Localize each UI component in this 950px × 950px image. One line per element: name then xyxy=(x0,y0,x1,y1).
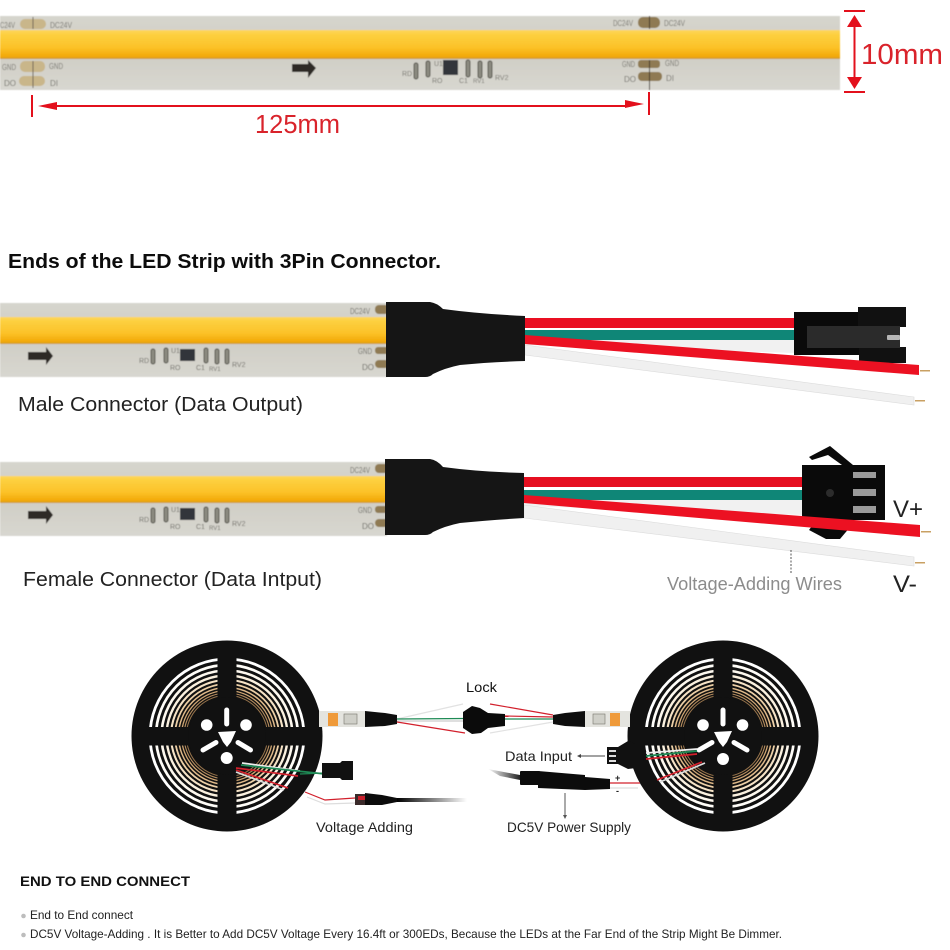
lock connector xyxy=(463,706,505,734)
left reel spare connector xyxy=(300,761,353,780)
125mm label: 125mm xyxy=(255,111,340,139)
note: end to end connect: End to End connect xyxy=(30,908,134,922)
pads xyxy=(375,464,389,527)
strip silkscreen labels: RO xyxy=(432,78,443,85)
panel: top LED strip xyxy=(0,16,840,90)
strip silkscreen labels: DI xyxy=(50,79,58,88)
right reel data input connector xyxy=(607,741,636,769)
silkscreen labels: RD xyxy=(139,358,149,365)
silkscreen labels: C1 xyxy=(196,365,205,372)
icon: direction arrow xyxy=(28,506,53,524)
heading: end to end connect: END TO END CONNECT xyxy=(20,873,190,889)
silkscreen labels: RV2 xyxy=(232,521,246,528)
female: rear wires xyxy=(524,477,925,566)
silkscreen labels: GND xyxy=(358,347,372,356)
dimension: 125mm xyxy=(31,92,650,139)
left solder pads xyxy=(19,17,46,88)
panel: female connector strip xyxy=(0,462,389,536)
label: V+: V+ xyxy=(893,496,923,523)
strip silkscreen labels: GND xyxy=(2,63,16,72)
right solder pads xyxy=(638,16,662,90)
silkscreen labels: DO xyxy=(362,522,374,531)
male: heat-shrink sleeve xyxy=(386,302,525,377)
silkscreen labels: U1 xyxy=(171,507,180,514)
yellow COB band xyxy=(0,476,387,503)
strip silkscreen labels: RV1 xyxy=(473,79,485,85)
left mini strip with lead xyxy=(319,704,465,733)
strip silkscreen labels: GND xyxy=(49,62,63,71)
icon: direction arrow xyxy=(28,347,53,365)
silkscreen labels: U1 xyxy=(171,348,180,355)
silkscreen labels: DC24V xyxy=(350,307,371,316)
strip silkscreen labels: C1 xyxy=(459,78,468,85)
silkscreen labels: DO xyxy=(362,363,374,372)
DC5V power plug xyxy=(488,769,640,796)
right mini strip with lead xyxy=(490,704,630,733)
female: connector housing xyxy=(802,446,885,539)
heading: ends of strip: Ends of the LED Strip with 3Pin Connector. xyxy=(8,251,441,273)
strip silkscreen labels: DI xyxy=(666,74,674,83)
strip silkscreen labels xyxy=(0,19,686,88)
note: voltage adding advice: DC5V Voltage-Adding . It is Better to Add DC5V Voltage Every 16.4ft or 300EDs, Because the LEDs at the Far End of the Strip Might Be Dimmer. xyxy=(30,927,782,941)
voltage adding plug xyxy=(305,792,467,805)
strip silkscreen labels: GND xyxy=(622,60,635,69)
silkscreen labels: RV1 xyxy=(209,526,221,532)
strip silkscreen labels: DO xyxy=(624,75,636,84)
male: rear wires xyxy=(525,318,925,405)
reel wires xyxy=(236,763,325,790)
silkscreen labels: RD xyxy=(139,517,149,524)
callout: data input xyxy=(505,748,605,764)
silkscreen labels: DC24V xyxy=(350,466,371,475)
strip silkscreen labels: C24V xyxy=(0,21,15,30)
strip silkscreen labels: DC24V xyxy=(664,19,686,28)
arrow: power supply pointer xyxy=(563,793,567,819)
callout: voltage-adding wires: Voltage-Adding Wires xyxy=(667,574,842,594)
pads xyxy=(375,305,389,368)
female: red voltage wire xyxy=(524,495,931,537)
chip and resistors xyxy=(151,348,229,364)
10mm label: 10mm xyxy=(861,39,943,71)
silkscreen labels: RV1 xyxy=(209,367,221,373)
strip silkscreen labels: DO xyxy=(4,79,16,88)
label: V-: V- xyxy=(893,571,917,598)
label: DC5V power supply: DC5V Power Supply xyxy=(507,819,631,835)
strip silkscreen labels: RD xyxy=(402,71,412,78)
icon: direction arrow xyxy=(292,60,316,78)
yellow COB band xyxy=(0,30,840,59)
chip and resistors xyxy=(414,60,492,79)
male: connector housing xyxy=(794,307,906,363)
DC5V power plug: - xyxy=(616,786,619,796)
reel wires xyxy=(646,749,705,782)
silkscreen labels xyxy=(139,466,374,532)
label: male connector: Male Connector (Data Output) xyxy=(18,394,303,416)
label: female connector: Female Connector (Data Intput) xyxy=(23,569,322,591)
silkscreen labels: RO xyxy=(170,524,181,531)
dimension: 10mm xyxy=(844,10,943,93)
male: red voltage wire xyxy=(525,335,930,375)
chip and resistors xyxy=(151,507,229,523)
icon: left LED reel xyxy=(132,640,325,832)
silkscreen labels: RO xyxy=(170,365,181,372)
panel: male connector strip xyxy=(0,303,389,377)
strip silkscreen labels: U1 xyxy=(434,61,443,68)
DC5V power plug: + xyxy=(615,773,620,783)
label: lock: Lock xyxy=(466,679,498,695)
strip silkscreen labels: DC24V xyxy=(613,19,634,28)
female: heat-shrink sleeve xyxy=(385,459,524,535)
yellow COB band xyxy=(0,317,387,344)
silkscreen labels: C1 xyxy=(196,524,205,531)
icon: right LED reel xyxy=(628,640,818,832)
silkscreen labels xyxy=(139,307,374,373)
strip silkscreen labels: GND xyxy=(665,59,679,68)
silkscreen labels: GND xyxy=(358,506,372,515)
label: voltage adding: Voltage Adding xyxy=(316,819,413,835)
silkscreen labels: RV2 xyxy=(232,362,246,369)
strip silkscreen labels: RV2 xyxy=(495,75,509,82)
strip silkscreen labels: DC24V xyxy=(50,21,73,30)
callout: data input: Data Input xyxy=(505,748,572,764)
